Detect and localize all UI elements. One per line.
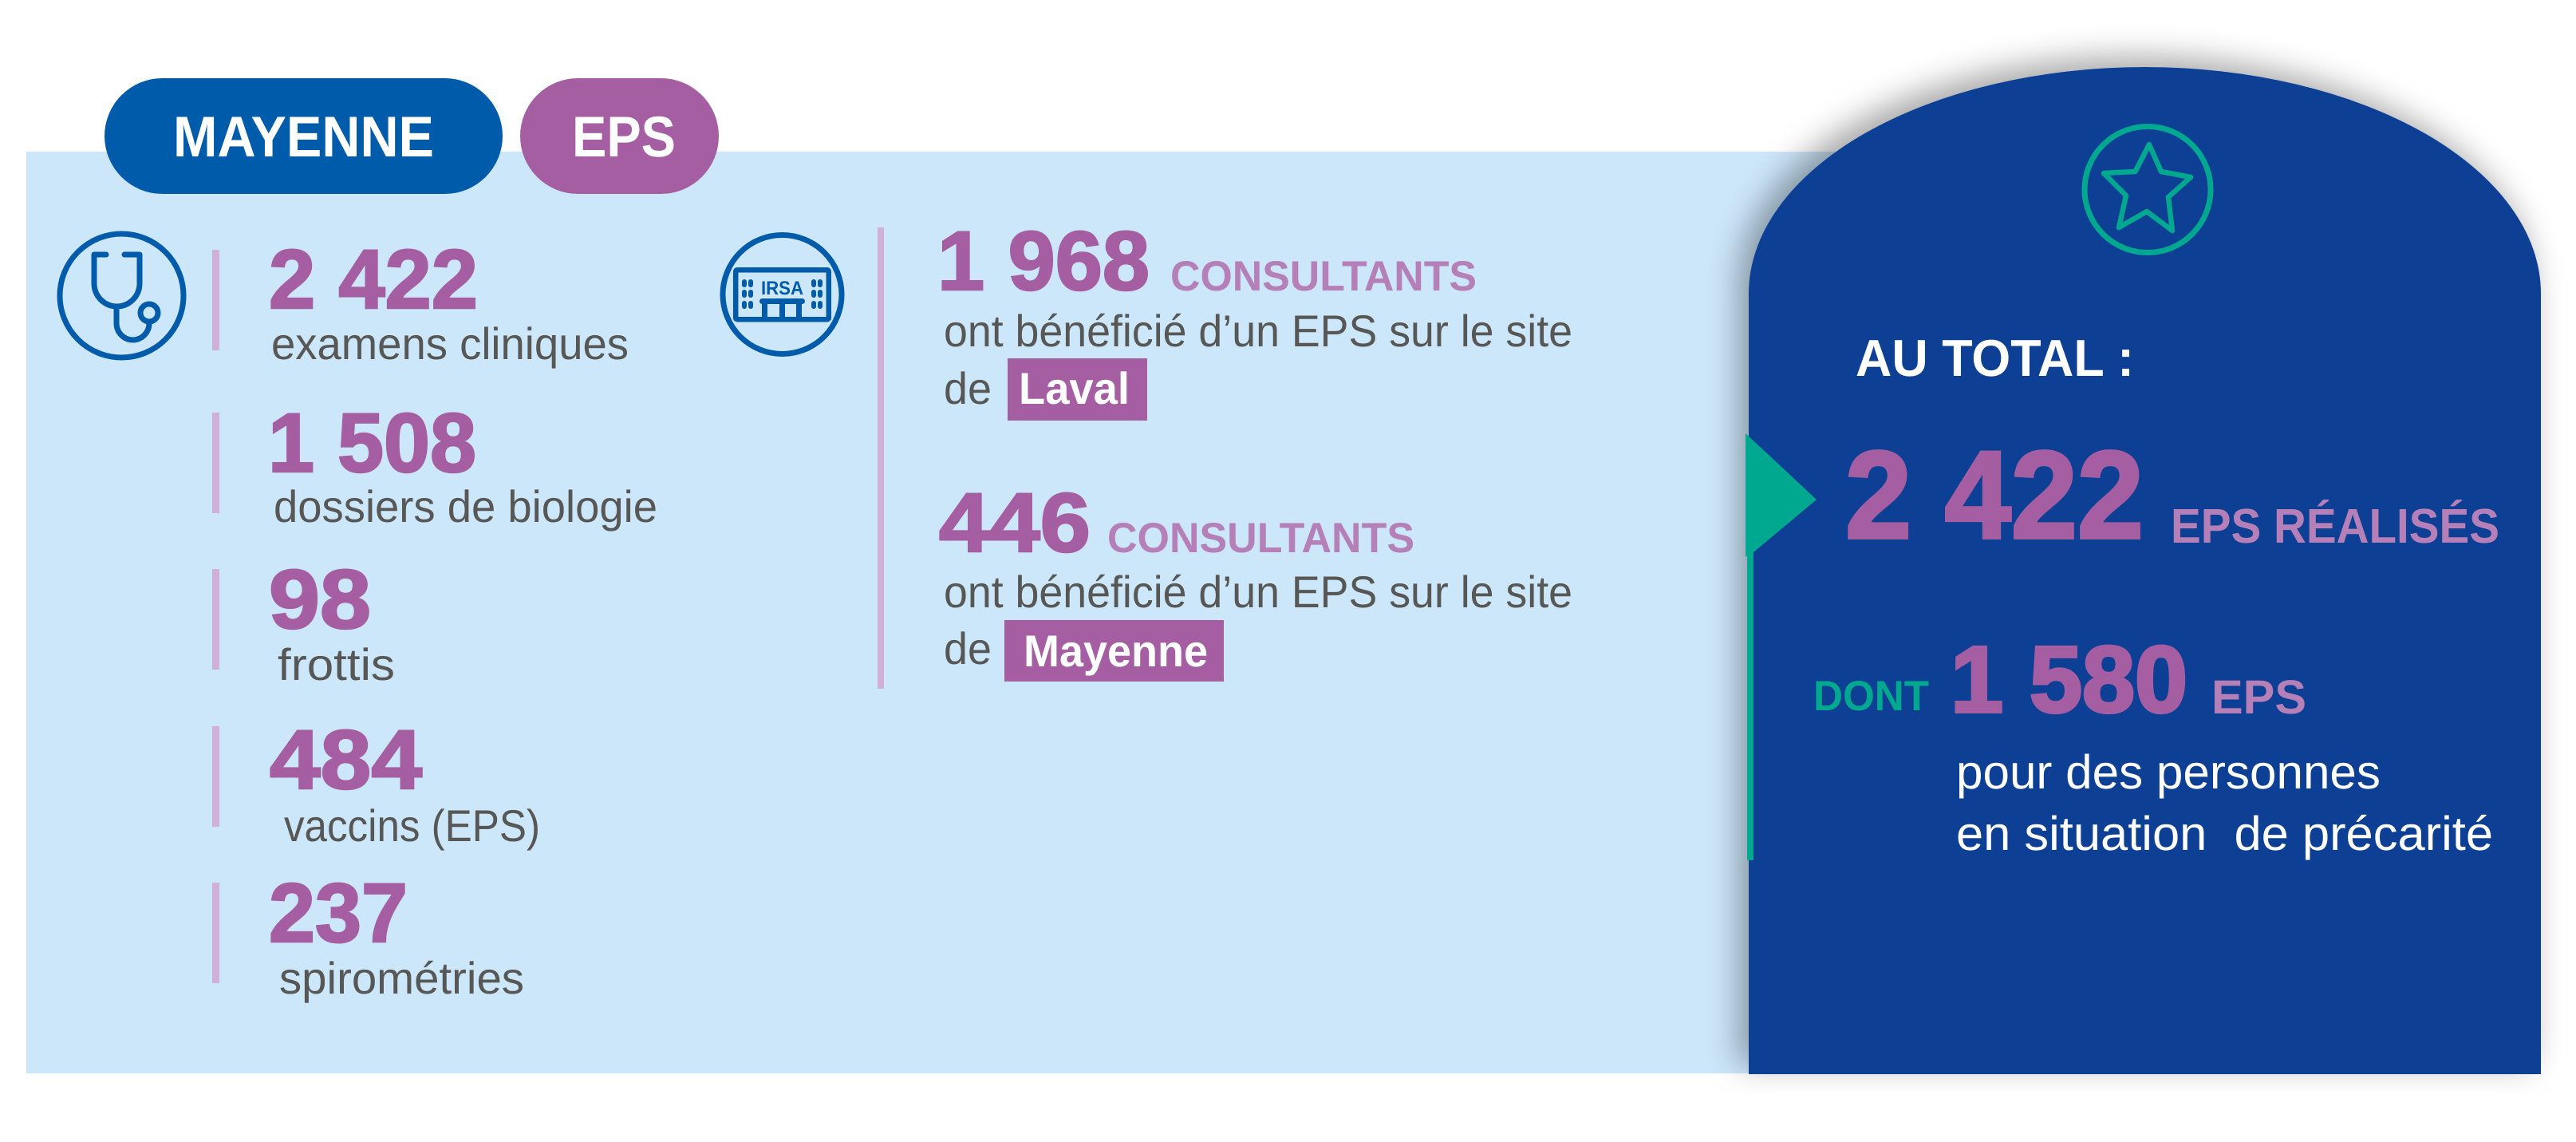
stat: consultants Laval: Laval [1019, 363, 1130, 413]
stat: consultants Laval: ont bénéficié d’un EPS sur le site [944, 306, 1572, 356]
panel: total [1749, 67, 2541, 1074]
stat: consultants Mayenne: CONSULTANTS [1107, 515, 1414, 562]
stat: consultants Mayenne: ont bénéficié d’un EPS sur le site [944, 567, 1572, 617]
stat: vaccins: 484 [270, 713, 422, 807]
stat: dont 1 580 EPS: DONT [1813, 673, 1929, 720]
divider: sites column [878, 227, 884, 689]
stat: consultants Laval [937, 215, 1572, 421]
stat: consultants Mayenne: Mayenne [1024, 626, 1208, 676]
arrow: green marker [1746, 433, 1817, 860]
pill: EPS: EPS [572, 105, 676, 169]
stat: consultants Mayenne: 446 [939, 476, 1091, 570]
stat: consultants Laval: CONSULTANTS [1170, 253, 1477, 300]
stat: consultants Laval: de [944, 363, 992, 413]
stat: dossiers de biologie: 1 508 [268, 397, 476, 490]
stat: vaccins: vaccins (EPS) [284, 800, 540, 851]
heading: au total: AU TOTAL : [1856, 329, 2134, 387]
stat: EPS réalisés: 2 422 [1845, 426, 2144, 565]
stat: spirométries: 237 [269, 867, 408, 960]
stat: dont 1 580 EPS: EPS [2211, 670, 2306, 724]
stat: spirométries [212, 867, 524, 1003]
pill: MAYENNE: MAYENNE [173, 105, 434, 169]
stat: frottis: 98 [269, 553, 371, 646]
stat: spirométries: spirométries [279, 953, 524, 1003]
icon: stethoscope [60, 234, 183, 358]
text: précarité: pour des personnes [1956, 745, 2381, 799]
stat: dossiers de biologie [212, 397, 657, 531]
text: précarité [1956, 745, 2493, 860]
stat: dont 1 580 EPS [1813, 627, 2306, 733]
icon: star [2085, 126, 2211, 252]
stat: EPS réalisés: EPS RÉALISÉS [2171, 499, 2499, 553]
stat: vaccins [212, 713, 540, 851]
pill: EPS [520, 78, 719, 194]
stat: dossiers de biologie: dossiers de biologie [274, 481, 657, 531]
stat: consultants Mayenne [939, 476, 1572, 682]
stat: frottis [212, 553, 395, 690]
icon: IRSA building: IRSA [761, 278, 803, 299]
stat: EPS réalisés [1845, 426, 2499, 565]
stat: consultants Mayenne: de [944, 623, 992, 674]
stat: examens cliniques: examens cliniques [271, 318, 629, 369]
icon: IRSA building [723, 235, 842, 354]
stat: dont 1 580 EPS: 1 580 [1951, 627, 2187, 733]
pill: MAYENNE [105, 78, 503, 194]
text: précarité: en situation de précarité [1956, 807, 2493, 860]
panel: light blue background [26, 152, 1941, 1073]
stat: examens cliniques: 2 422 [269, 233, 478, 326]
stat: examens cliniques [212, 233, 629, 369]
stat: frottis: frottis [278, 639, 395, 690]
stat: consultants Laval: 1 968 [937, 215, 1150, 308]
